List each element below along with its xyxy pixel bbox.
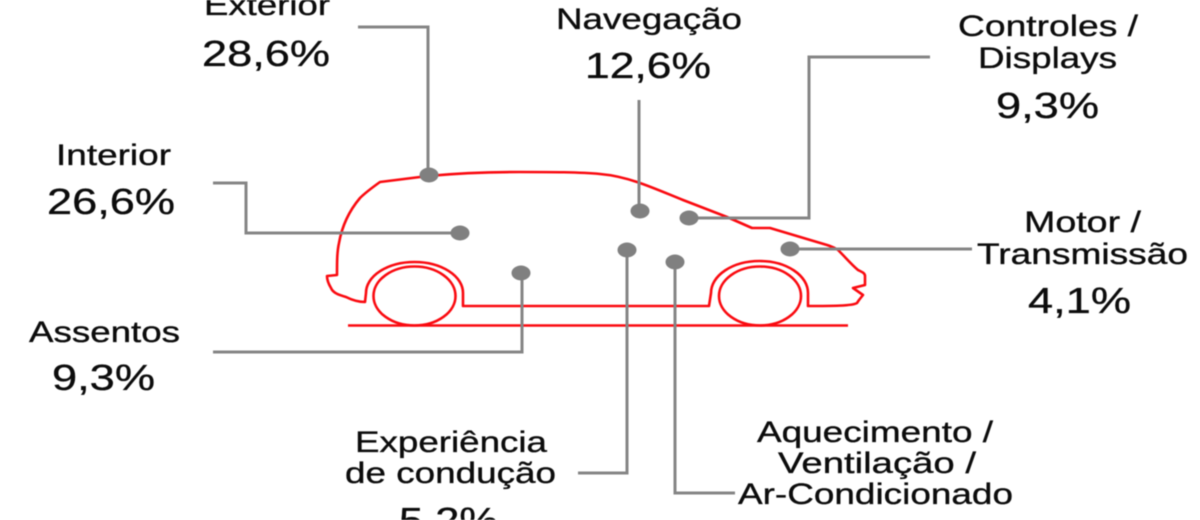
label: motor: 4,1% xyxy=(1028,280,1131,321)
leader: assentos xyxy=(213,266,530,352)
label: assentos: 9,3% xyxy=(52,357,155,398)
label: aquecimento: Ar-Condicionado xyxy=(738,478,1013,511)
label: interior: Interior xyxy=(56,139,171,172)
label: experiencia: de condução xyxy=(345,457,556,490)
label: controles: Displays xyxy=(978,42,1117,75)
label: motor: Transmissão xyxy=(977,238,1188,271)
label: navegacao: Navegação xyxy=(556,3,742,36)
label: navegacao xyxy=(556,3,742,86)
leader: exterior xyxy=(358,27,438,182)
label: exterior: 28,6% xyxy=(202,33,330,74)
label: interior: 26,6% xyxy=(47,181,175,222)
label: aquecimento: Aquecimento / xyxy=(757,416,994,449)
label: experiencia: Experiência xyxy=(355,426,547,459)
label: motor: Motor / xyxy=(1024,206,1142,239)
leader: experiencia xyxy=(578,242,636,473)
label: interior xyxy=(47,139,175,222)
car outline xyxy=(327,172,865,326)
label: experiencia xyxy=(345,426,556,520)
label: aquecimento xyxy=(738,416,1013,511)
leader: controles xyxy=(680,57,930,226)
leader: aquecimento xyxy=(666,254,735,493)
label: controles: 9,3% xyxy=(996,85,1099,126)
label: motor xyxy=(977,206,1188,321)
leader: navegacao xyxy=(630,100,650,218)
leader: motor xyxy=(780,242,972,256)
label: controles xyxy=(958,10,1139,126)
leader: interior xyxy=(213,183,470,240)
label: aquecimento: Ventilação / xyxy=(778,447,977,480)
label: navegacao: 12,6% xyxy=(585,45,711,86)
label: controles: Controles / xyxy=(958,10,1139,43)
label: assentos: Assentos xyxy=(29,316,180,349)
label: assentos xyxy=(29,316,180,398)
label: exterior xyxy=(202,0,330,74)
